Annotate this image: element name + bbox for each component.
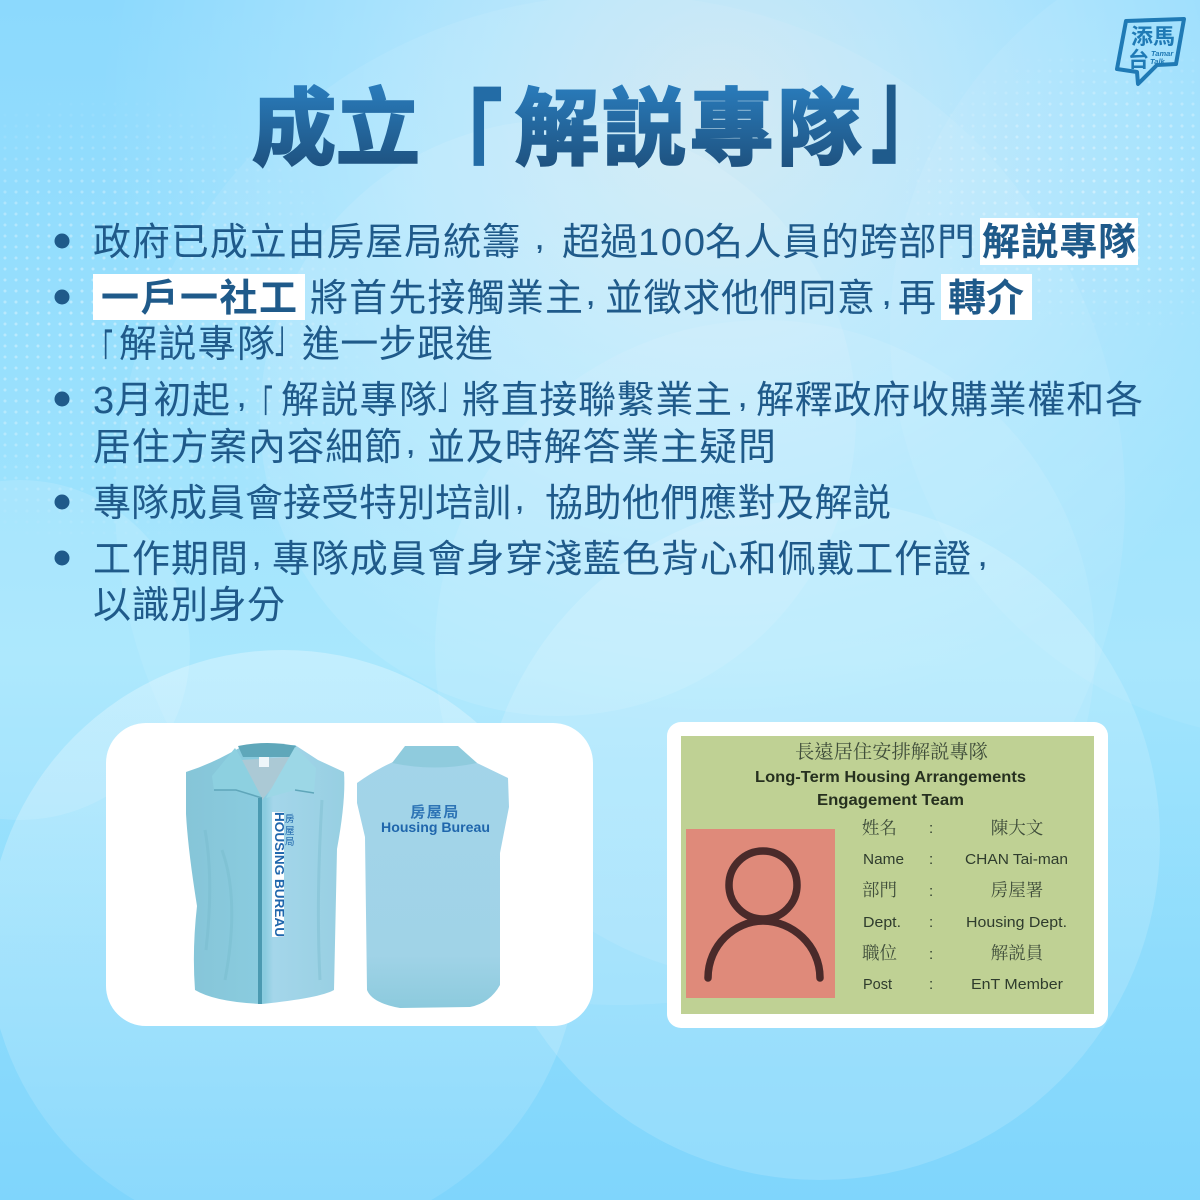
panel: staff ID card bbox=[667, 722, 1108, 1028]
vest front: 局 bbox=[285, 837, 295, 848]
card details: : bbox=[929, 851, 933, 868]
bullet 4: , bbox=[516, 486, 523, 516]
bullet 2: 」 bbox=[275, 310, 298, 362]
bullet 2: 並徵求他們同意 bbox=[605, 278, 875, 320]
card details: Post bbox=[863, 976, 893, 993]
bullet 3: 並及時解答業主疑問 bbox=[427, 427, 776, 469]
card title bbox=[755, 741, 1026, 809]
card details bbox=[862, 818, 1068, 993]
bullet 1: 超過 bbox=[562, 222, 638, 264]
bullet 2: 轉介 bbox=[948, 278, 1024, 320]
vest back: 房屋局 bbox=[410, 804, 460, 821]
bullet 5: 以識別身分 bbox=[93, 585, 285, 627]
bullet 1: 名人員的跨部門 bbox=[705, 222, 975, 264]
bullet 3: , bbox=[739, 383, 746, 413]
card title: 長遠居住安排解説專隊 bbox=[795, 741, 988, 763]
card details: Housing Dept. bbox=[966, 914, 1067, 931]
bullet 3: 將直接聯繫業主 bbox=[462, 380, 732, 422]
card details: 部門 bbox=[862, 880, 897, 900]
bullet 3: 解説專隊 bbox=[281, 380, 437, 422]
bullet 3: 3月初起 bbox=[93, 380, 230, 422]
title bbox=[252, 42, 938, 217]
vest front bbox=[186, 743, 344, 1004]
card details: : bbox=[929, 883, 933, 900]
card title: Engagement Team bbox=[817, 792, 964, 809]
card title: Long-Term Housing Arrangements bbox=[755, 769, 1026, 786]
bullet 1: 政府已成立由房屋局統籌 bbox=[93, 222, 520, 264]
vest front: HOUSING BUREAU bbox=[272, 812, 286, 937]
bullet 1: 解説專隊 bbox=[982, 222, 1136, 264]
bullet 4: 協助他們應對及解説 bbox=[545, 483, 891, 525]
bullet 2: 進一步跟進 bbox=[302, 324, 493, 366]
bullet 5 bbox=[54, 539, 986, 627]
bullet 3: 」 bbox=[438, 366, 461, 418]
bullet 1: , bbox=[536, 225, 543, 255]
card details: 姓名 bbox=[862, 818, 897, 838]
bullet 2: 「 bbox=[90, 326, 113, 378]
bullet 3: 解釋政府收購業權和各 bbox=[756, 380, 1143, 422]
bullet 5: , bbox=[253, 542, 260, 572]
bullet 2: 將首先接觸業主 bbox=[310, 278, 583, 320]
bullet list bbox=[54, 218, 1143, 627]
vest back: Housing Bureau bbox=[381, 820, 490, 835]
bullet 3 bbox=[54, 366, 1143, 469]
bullet 2: 一戶一社工 bbox=[101, 278, 297, 320]
title: 成立 bbox=[252, 82, 420, 176]
bullet 5: , bbox=[979, 542, 986, 572]
highlight: 轉介 bbox=[941, 274, 1032, 320]
logo: Tamar Talk: Tamar bbox=[1151, 49, 1174, 58]
bullet 2: , bbox=[883, 281, 890, 311]
card details: EnT Member bbox=[971, 976, 1063, 993]
card details: : bbox=[929, 914, 933, 931]
bullet 5: 工作期間 bbox=[93, 539, 248, 581]
bullet 4 bbox=[54, 483, 891, 525]
bullet 2 bbox=[54, 278, 1024, 378]
title: 「 bbox=[423, 81, 503, 217]
vest front: 房 bbox=[285, 813, 295, 825]
vest back bbox=[357, 746, 509, 1008]
card details: Dept. bbox=[863, 914, 901, 931]
bullet 2: 再 bbox=[898, 278, 936, 320]
card details: 職位 bbox=[862, 943, 897, 963]
portrait placeholder bbox=[686, 829, 835, 998]
bullet 1 bbox=[54, 222, 1136, 264]
bullet 5: 專隊成員會身穿淺藍色背心和佩戴工作證 bbox=[272, 539, 971, 581]
card details: 陳大文 bbox=[991, 818, 1043, 838]
bullet 4: 專隊成員會接受特別培訓 bbox=[93, 483, 511, 525]
highlight: 解説專隊 bbox=[980, 218, 1138, 265]
logo: Tamar Talk: 添馬 bbox=[1131, 25, 1175, 49]
logo: Tamar Talk: Talk bbox=[1150, 57, 1166, 66]
bullet 3: 「 bbox=[250, 382, 273, 434]
card details: : bbox=[929, 820, 933, 837]
logo: Tamar Talk bbox=[1117, 19, 1184, 84]
title: 解説專隊 bbox=[515, 82, 861, 176]
card details: : bbox=[929, 976, 933, 993]
bullet 3: 居住方案內容細節 bbox=[93, 427, 402, 469]
card details: 解説員 bbox=[991, 943, 1043, 963]
card details: Name bbox=[863, 851, 904, 868]
bullet 2: , bbox=[587, 281, 594, 311]
bullet 3: , bbox=[238, 383, 245, 413]
card details: : bbox=[929, 946, 933, 963]
highlight: 一戶一社工 bbox=[93, 274, 305, 320]
bullet 1: 100 bbox=[638, 222, 705, 264]
logo: Tamar Talk: 台 bbox=[1128, 48, 1149, 72]
card details: CHAN Tai-man bbox=[965, 851, 1068, 868]
panel: vest photo bbox=[106, 723, 593, 1026]
bullet 2: 解説專隊 bbox=[119, 324, 275, 366]
bullet 3: , bbox=[407, 430, 414, 460]
card details: 房屋署 bbox=[991, 880, 1043, 900]
vest front: 屋 bbox=[285, 826, 295, 837]
title: 」 bbox=[871, 42, 938, 178]
